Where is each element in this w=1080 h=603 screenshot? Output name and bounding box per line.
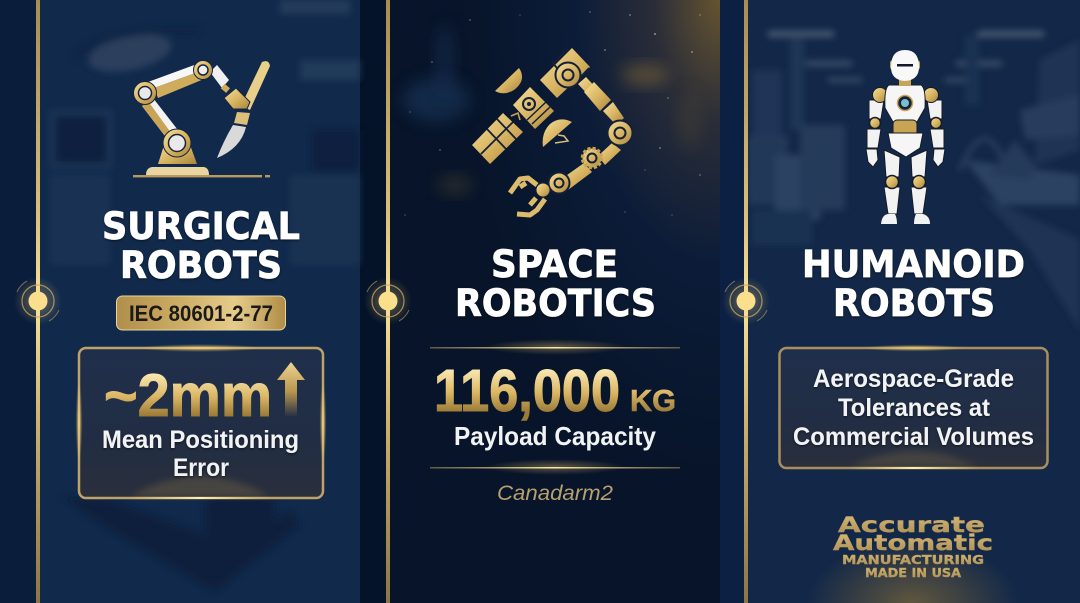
solar panel upper xyxy=(540,48,590,98)
divider glow: bottom xyxy=(430,459,680,475)
logo: Accurate Automatic Manufacturing: Automatic xyxy=(833,531,993,555)
label: tolerances text: Aerospace-Grade xyxy=(813,365,1014,393)
panel: surgical background xyxy=(40,0,360,603)
vertical line: middle xyxy=(386,0,390,603)
icon: space station and robotic arm xyxy=(472,48,632,215)
heading: surgical robots xyxy=(102,205,300,287)
label: mean positioning error: Mean Positioning xyxy=(102,426,299,454)
vertical line: left xyxy=(36,0,40,603)
badge: IEC standard: IEC 80601-2-77 xyxy=(129,301,273,326)
label: tolerances text: Commercial Volumes xyxy=(793,423,1034,451)
panel: space background xyxy=(390,0,720,603)
badge: IEC standard xyxy=(116,296,286,330)
heading: humanoid robots: ROBOTS xyxy=(833,282,995,325)
label: tolerances text xyxy=(793,365,1034,451)
stat: payload capacity xyxy=(434,358,676,451)
logo: Accurate Automatic Manufacturing: Accurate xyxy=(838,513,985,537)
arm xyxy=(536,62,632,197)
heading: humanoid robots xyxy=(802,243,1025,325)
logo: Accurate Automatic Manufacturing xyxy=(808,513,1018,603)
icon: up arrow xyxy=(277,362,305,416)
gripper xyxy=(510,178,545,215)
node: middle glow xyxy=(364,277,412,325)
icon: humanoid robot xyxy=(866,50,945,224)
logo: Accurate Automatic Manufacturing: MADE IN USA xyxy=(865,565,961,580)
logo: Accurate Automatic Manufacturing: MANUFACTURING xyxy=(842,552,984,567)
heading: surgical robots: ROBOTS xyxy=(120,244,282,287)
arms xyxy=(866,88,945,167)
stat: payload capacity: Payload Capacity xyxy=(454,421,657,451)
heading: humanoid robots: HUMANOID xyxy=(802,243,1025,286)
vertical line: right xyxy=(744,0,748,603)
callout: aerospace-grade tolerances xyxy=(780,344,1048,469)
stat: payload capacity: KG xyxy=(630,383,676,418)
icon: surgical robot arm with scalpel xyxy=(133,60,270,177)
heading: space robotics: ROBOTICS xyxy=(455,282,656,325)
heading: space robotics: SPACE xyxy=(491,243,618,286)
label: mean positioning error: Error xyxy=(173,454,229,482)
value: 2mm: ~2mm xyxy=(104,362,272,429)
label: tolerances text: Tolerances at xyxy=(838,394,991,422)
heading: surgical robots: SURGICAL xyxy=(102,205,300,248)
divider glow: top xyxy=(430,339,680,355)
caption: Canadarm2: Canadarm2 xyxy=(497,481,613,505)
heading: space robotics xyxy=(455,243,656,325)
label: mean positioning error xyxy=(102,426,299,482)
node: right glow xyxy=(722,277,770,325)
callout: mean positioning error xyxy=(76,344,326,499)
head xyxy=(890,50,920,86)
panel: factory background xyxy=(748,0,1080,603)
stat: payload capacity: 116,000 xyxy=(434,358,620,424)
legs xyxy=(881,150,930,224)
torso xyxy=(885,85,925,157)
solar panel lower xyxy=(472,113,523,164)
node: left glow xyxy=(14,277,62,325)
satellite body xyxy=(495,68,572,147)
